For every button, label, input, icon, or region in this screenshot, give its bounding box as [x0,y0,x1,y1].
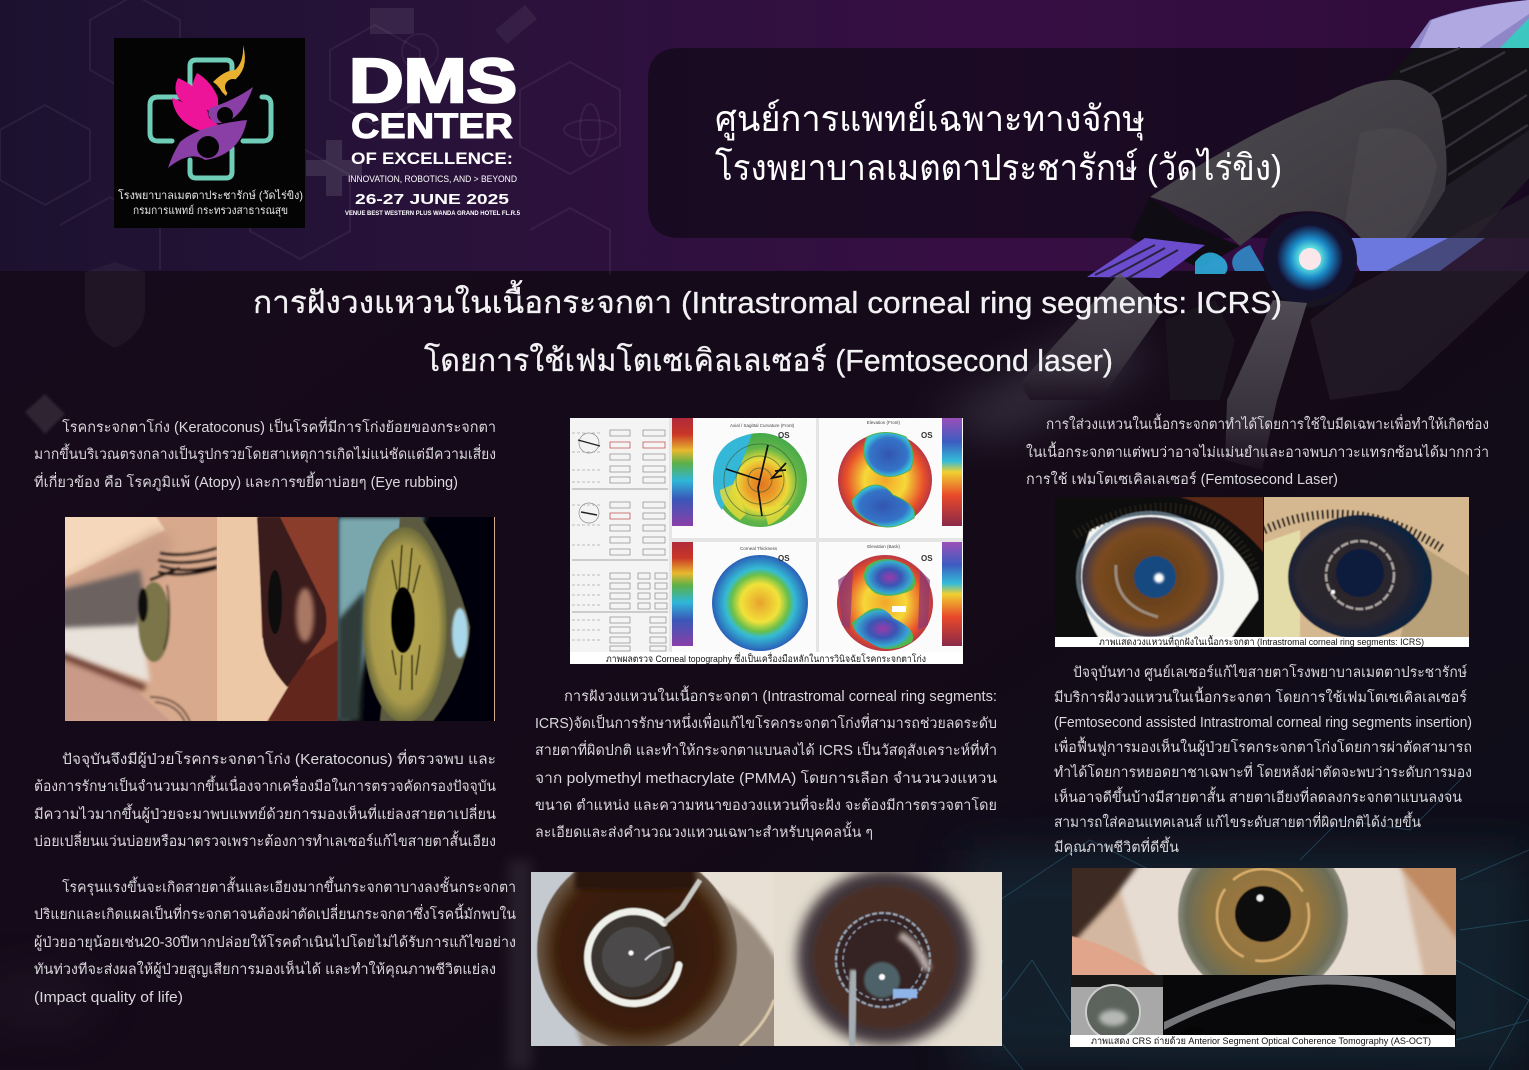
DMS center event logo: OF EXCELLENCE: [351,149,513,168]
text block: ICRS treatment [535,685,997,841]
text block: blade ICRS: ในเนื้อกระจกตาแต่พบว่าอาจไม่แม่นยำและอาจพบภาวะแทรกซ้อนได้มากกว่า [1026,441,1489,461]
map: axial curvature: Axial / Sagittal Curvature (Front) [730,423,795,428]
text block: femtosecond service: เพื่อฟื้นฟูการมองเห็นในผู้ป่วยโรคกระจกตาโก่งโดยการผ่าตัดสามารถ [1054,736,1472,756]
chart: corneal topography maps [570,418,963,665]
text block: disease severity: โรครุนแรงขึ้นจะเกิดสายตาสั้นและเอียงมากขึ้นกระจกตาบางลงชั้นกระจกตา [62,876,516,896]
header title: ศูนย์การแพทย์เฉพาะทางจักษุ [715,98,1145,141]
text block: femtosecond service: สามารถใส่คอนแทคเลนส์ แก้ไขระดับสายตาที่ผิดปกติได้ง่ายขึ้น [1054,811,1421,831]
image: implanted ring eyes [1048,490,1476,648]
text block: disease severity: (Impact quality of life) [34,990,183,1006]
image: ring insertion surgery [525,850,1008,1055]
text block: disease severity: ทันท่วงทีจะส่งผลให้ผู้ป่วยสูญเสียการมองเห็นได้ และทำให้คุณภาพชีวิตแย่ลง [34,959,496,978]
text block: femtosecond service: เห็นอาจดีขึ้นบ้างมีสายตาสั้น สายตาเอียงที่ลดลงกระจกตาแบนลงจน [1054,786,1462,806]
text block: disease severity: ปริแยกและเกิดแผลเป็นที่กระจกตาจนต้องผ่าตัดเปลี่ยนกระจกตาซึ่งโรคนี้มักพบใน [34,903,516,923]
map: elevation back: OS [921,554,933,563]
text block: keratoconus definition: ที่เกี่ยวข้อง คือ โรคภูมิแพ้ (Atopy) และการขยี้ตาบ่อยๆ (Eye rubbing) [34,471,458,491]
logo caption [118,188,303,217]
text block: patients diagnosed: บ่อยเปลี่ยนแว่นบ่อยหรือมาตรวจเพราะต้องการทำเลเซอร์แก้ไขสายตาสั้นเอียง [34,830,496,850]
DMS center event logo: CENTER [351,107,513,146]
text block: ICRS treatment: ละเอียดและส่งคำนวณวงแหวนเฉพาะสำหรับบุคคลนั้น ๆ [535,821,873,841]
image: ICRS photo and AS-OCT [1066,830,1462,1047]
text block: keratoconus definition: โรคกระจกตาโก่ง (Keratoconus) เป็นโรคที่มีการโก่งย้อยของกระจกตา [62,417,496,436]
text block: ICRS treatment: สายตาที่ผิดปกติ และทำให้กระจกตาแบนลงได้ ICRS เป็นวัสดุสังเคราะห์ที่ทำ [535,740,997,759]
DMS center event logo: VENUE BEST WESTERN PLUS WANDA GRAND HOTEL FL.R.5 [345,211,521,217]
DMS center event logo: INNOVATION, ROBOTICS, AND > BEYOND [348,174,517,184]
header panel [648,48,1529,238]
text block: ICRS treatment: การฝังวงแหวนในเนื้อกระจกตา (Intrastromal corneal ring segments: [564,685,997,705]
caption: implanted ring: ภาพแสดงวงแหวนที่ถูกฝังในเนื้อกระจกตา (Intrastromal corneal ring segments: ICRS) [1099,635,1424,648]
caption: AS-OCT: ภาพแสดง CRS ถ่ายด้วย Anterior Segment Optical Coherence Tomography (AS-OCT) [1091,1036,1431,1047]
hospital logo [114,38,305,228]
text block: disease severity: ผู้ป่วยอายุน้อยเช่น20-30ปีหากปล่อยให้โรคดำเนินไปโดยไม่ได้รับการแก้ไขอย่าง [34,933,516,951]
text block: blade ICRS [1026,413,1489,488]
map: elevation front [819,418,963,538]
text block: femtosecond service: มีบริการฝังวงแหวนในเนื้อกระจกตา โดยการใช้เฟมโตเซเคิลเลเซอร์ [1054,686,1467,706]
text block: blade ICRS: การใส่วงแหวนในเนื้อกระจกตาทำได้โดยการใช้ใบมีดเฉพาะเพื่อทำให้เกิดช่อง [1046,413,1489,433]
text block: keratoconus definition: มากขึ้นบริเวณตรงกลางเป็นรูปกรวยโดยสาเหตุการเกิดไม่แน่ชัดแต่มีความเสี่ยง [34,443,496,463]
caption: corneal topography: ภาพผลตรวจ Corneal topography ซึ่งเป็นเครื่องมือหลักในการวินิจฉัยโรคกระจกตาโก่ง [606,652,926,665]
text block: disease severity [34,876,516,1006]
map: corneal thickness [672,542,816,652]
DMS center event logo [345,47,521,217]
text block: patients diagnosed: ต้องการรักษาเป็นจำนวนมากขึ้นเนื่องจากเครื่องมือในการตรวจคัดกรองปัจจุบัน [34,775,496,795]
map: elevation back: Elevation (Back) [867,544,900,549]
text block: ICRS treatment: ICRS)จัดเป็นการรักษาหนึ่งเพื่อแก้ไขโรคกระจกตาโก่งที่สามารถช่วยลดระดับ [535,713,997,732]
icon: teal medical cross [150,60,271,178]
logo caption: กรมการแพทย์ กระทรวงสาธารณสุข [133,204,288,217]
map: corneal thickness: OS [778,554,790,563]
map: elevation back [819,542,963,652]
robot arm illustration [1020,0,1529,470]
icon: pink lotus petals [172,73,222,133]
text block: femtosecond service: มีคุณภาพชีวิตที่ดีขึ้น [1054,836,1179,856]
header title: โรงพยาบาลเมตตาประชารักษ์ (วัดไร่ขิง) [715,147,1282,188]
text block: keratoconus definition [34,417,496,491]
logo caption: โรงพยาบาลเมตตาประชารักษ์ (วัดไร่ขิง) [118,188,303,202]
map: axial curvature: OS [778,431,790,440]
icon: gold flame [213,45,245,96]
text block: ICRS treatment: จาก polymethyl methacrylate (PMMA) โดยการเลือก จำนวนวงแหวน [535,769,997,787]
text block: femtosecond service: ทำได้โดยการหยอดยาชาเฉพาะที่ โดยหลังผ่าตัดจะพบว่าระดับการมอง [1054,762,1472,781]
text block: patients diagnosed [34,749,496,850]
text block: femtosecond service: ปัจจุบันทาง ศูนย์เลเซอร์แก้ไขสายตาโรงพยาบาลเมตตาประชารักษ์ [1073,663,1467,681]
map: elevation front: OS [921,431,933,440]
icon: purple figures [168,87,253,168]
text block: patients diagnosed: ปัจจุบันจึงมีผู้ป่วยโรคกระจกตาโก่ง (Keratoconus) ที่ตรวจพบ และ [62,749,496,768]
DMS center event logo: 26-27 JUNE 2025 [355,191,509,208]
text block: patients diagnosed: มีความไวมากขึ้นผู้ป่วยจะมาพบแพทย์ด้วยการมองเห็นที่แย่ลงสายตาเปลี่ยน [34,803,496,823]
text block: blade ICRS: การใช้ เฟมโตเซเคิลเลเซอร์ (Femtosecond Laser) [1026,470,1338,488]
image: keratoconus eye side views [55,507,500,731]
data tables panel [570,418,669,652]
text block: ICRS treatment: ขนาด ตำแหน่ง และความหนาของวงแหวนที่จะฝัง จะต้องมีการตรวจตาโดย [535,795,997,814]
main title: การฝังวงแหวนในเนื้อกระจกตา (Intrastromal corneal ring segments: ICRS) [253,280,1282,320]
map: elevation front: Elevation (Front) [867,420,900,425]
DMS center event logo: DMS [349,47,517,116]
main title [253,280,1282,378]
OCT cornea scan [1164,975,1455,1030]
text block: femtosecond service [1054,663,1472,856]
text block: femtosecond service: (Femtosecond assisted Intrastromal corneal ring segments insertion) [1054,715,1472,731]
map: corneal thickness: Corneal Thickness [740,546,778,551]
header title [715,98,1282,188]
map: axial curvature [672,418,816,538]
main title: โดยการใช้เฟมโตเซเคิลเลเซอร์ (Femtosecond laser) [424,343,1113,378]
